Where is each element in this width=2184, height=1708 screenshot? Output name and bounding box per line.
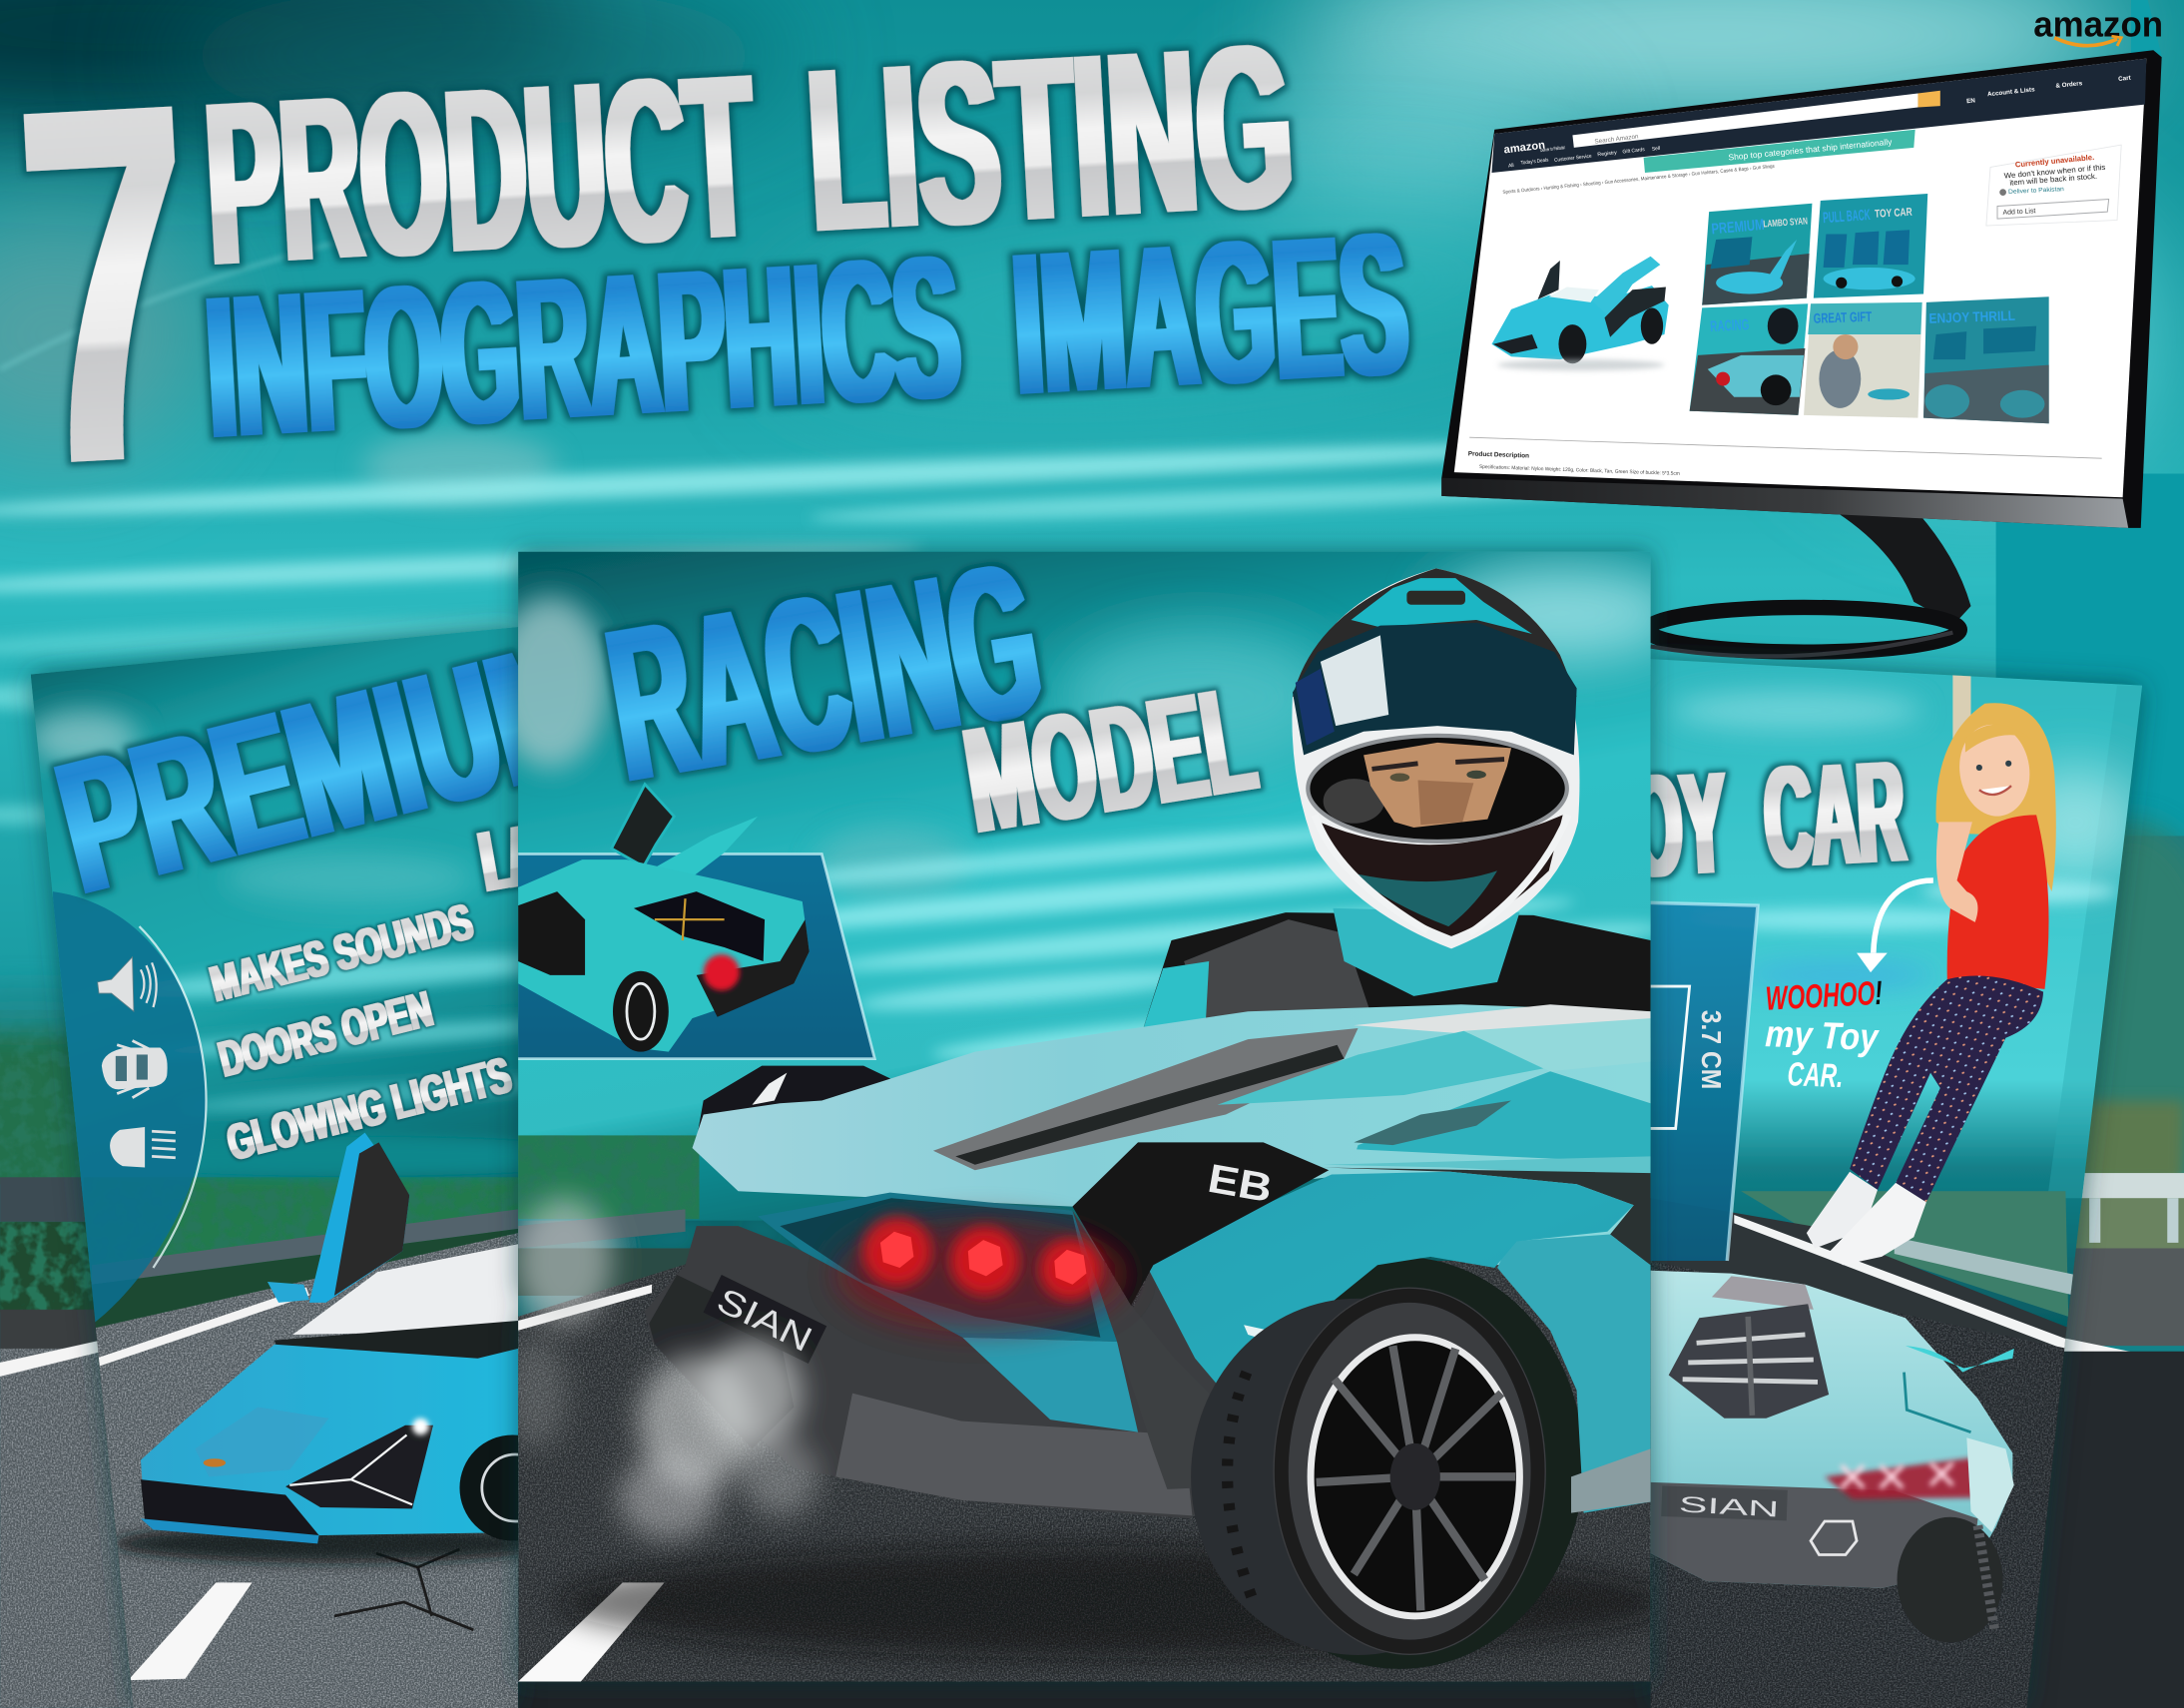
thumbnail: premium: LAMBO SYAN bbox=[1763, 216, 1808, 230]
amazon nav bar: & Orders bbox=[2055, 80, 2083, 90]
monitor screen bbox=[1454, 59, 2146, 497]
inset car: open doors bbox=[518, 785, 810, 1052]
background: road scene right bbox=[2005, 822, 2184, 1708]
callout: woohoo: WOOHOO! bbox=[1765, 975, 1884, 1018]
amazon nav bar: Cart bbox=[2118, 75, 2132, 83]
amazon nav bar: Deliver to Pakistan bbox=[1540, 145, 1566, 154]
callout arrow bbox=[1857, 880, 1933, 972]
icon: speaker bbox=[98, 957, 157, 1011]
amazon nav bar: EN bbox=[1966, 97, 1976, 105]
title line 2: infographics images: INFOGRAPHICS bbox=[202, 213, 965, 480]
panel: left premium bbox=[14, 611, 525, 1708]
feature: makes sounds: MAKES SOUNDS bbox=[205, 893, 478, 1012]
heading: lambo syan: LAMBO SYAN bbox=[474, 768, 766, 910]
monitor stand bbox=[1648, 513, 1971, 656]
driver in helmet bbox=[1139, 568, 1651, 1041]
big car: sian rear three-quarter: EB bbox=[1205, 1155, 1276, 1211]
lower dark bumper bbox=[645, 1226, 1248, 1518]
callout: woohoo: CAR. bbox=[1787, 1056, 1844, 1095]
center panel road bbox=[518, 1261, 1651, 1681]
monitor bbox=[1441, 50, 2162, 656]
license plate: SIAN bbox=[711, 1281, 819, 1360]
taillights bbox=[835, 1216, 1128, 1334]
callout: woohoo bbox=[1765, 975, 1884, 1095]
title line 1: product listing: PRODUCT bbox=[201, 26, 760, 314]
exhaust smoke bbox=[506, 1197, 819, 1539]
right car: sian rear bbox=[1651, 1271, 2014, 1642]
girl on rope bbox=[1807, 663, 2056, 1265]
icon: car with open doors bbox=[102, 1041, 168, 1098]
product description: Product Description bbox=[1468, 450, 1529, 459]
quarter panel bbox=[1497, 1234, 1651, 1513]
teal promo banner bbox=[1644, 130, 1915, 173]
wing badge bbox=[1072, 1142, 1329, 1306]
product description: Specifications: Material: Nylon Weight: 120g, Color: Black, Tan, Green Size of buckle: 5*3.5cm bbox=[1479, 464, 1680, 477]
left car: sian front bbox=[112, 1133, 566, 1563]
right panel sky bbox=[1651, 659, 2145, 1338]
amazon nav bar bbox=[1491, 59, 2146, 173]
right car: sian rear: SIAN bbox=[1678, 1491, 1780, 1521]
body upper deck bbox=[693, 1004, 1651, 1265]
main product car on screen bbox=[1491, 257, 1669, 370]
panel: right toy car bbox=[1586, 659, 2145, 1708]
number 7: 7 bbox=[11, 0, 204, 572]
driver suit bbox=[1139, 912, 1651, 1041]
panel: center racing model bbox=[492, 517, 1685, 1681]
taillight panel bbox=[758, 1193, 1117, 1342]
center panel sky bbox=[492, 552, 1685, 1221]
license plate bbox=[703, 1275, 826, 1364]
heading: toy car: TOY bbox=[1586, 742, 1730, 910]
right panel road bbox=[1651, 1191, 2075, 1708]
thumbnail: racing: RACING bbox=[1710, 316, 1750, 335]
thumbnail: gift for kids bbox=[1804, 302, 1922, 418]
racing helmet bbox=[1292, 568, 1580, 948]
amazon logo: amazon bbox=[2033, 3, 2163, 44]
rear wing bbox=[695, 1066, 892, 1156]
heading: premium: PREMIUM bbox=[41, 599, 613, 934]
thumbnail: pull back: TOY CAR bbox=[1875, 207, 1912, 221]
panel: right toy car: CAR bbox=[1761, 730, 1909, 898]
availability box: We don't know when or if this bbox=[2003, 163, 2106, 181]
big car: sian rear three-quarter bbox=[506, 1004, 1671, 1669]
dimension box: 3.7 CM bbox=[1696, 1010, 1727, 1089]
availability box: Add to List bbox=[2002, 208, 2036, 217]
thumbnail: pull back: PULL BACK bbox=[1823, 207, 1871, 227]
breadcrumb: Sports & Outdoors › Hunting & Fishing › Shooting › Gun Accessories, Maintenance & Storage › Gun Holsters, Cases & Bags › Gun Slings bbox=[1502, 164, 1776, 196]
dimension box bbox=[1651, 902, 1758, 1261]
teal promo banner: Shop top categories that ship internationally bbox=[1728, 137, 1894, 162]
monitor bezel bbox=[1441, 50, 2162, 528]
callout: woohoo: my Toy bbox=[1765, 1012, 1881, 1058]
icon: headlight bbox=[110, 1127, 176, 1168]
amazon nav bar: Sell bbox=[1652, 146, 1661, 153]
background: road scene left bbox=[0, 987, 153, 1708]
availability box: item will be back in stock. bbox=[2009, 172, 2097, 188]
amazon nav bar: Gift Cards bbox=[1622, 147, 1646, 156]
amazon nav bar: Customer Service bbox=[1554, 154, 1592, 164]
heading: model: MODEL bbox=[955, 654, 1265, 864]
thumbnail: premium: PREMIUM bbox=[1711, 217, 1765, 238]
thumbnail: pull back bbox=[1814, 194, 1927, 298]
availability box: Currently unavailable. bbox=[2014, 153, 2095, 169]
thumbnail: enjoy thrill: ENJOY THRILL bbox=[1928, 307, 2016, 326]
amazon nav bar: amazon bbox=[1503, 139, 1546, 156]
amazon nav bar: Search Amazon bbox=[1594, 133, 1639, 146]
feature: doors open: DOORS OPEN bbox=[214, 980, 438, 1087]
wheel arch bbox=[1216, 1257, 1584, 1669]
left panel trees and guardrail bbox=[78, 1126, 518, 1328]
availability box bbox=[1986, 145, 2121, 226]
fender bbox=[1146, 1172, 1634, 1413]
circle highlight panel bbox=[53, 891, 207, 1324]
thumbnail: premium bbox=[1702, 204, 1812, 305]
availability box: Deliver to Pakistan bbox=[2008, 186, 2065, 196]
thumbnail: racing bbox=[1690, 303, 1808, 415]
amazon nav bar: Account & Lists bbox=[1987, 86, 2035, 98]
left panel road bbox=[84, 1233, 518, 1708]
feature: glowing lights: GLOWING LIGHTS bbox=[222, 1047, 516, 1171]
amazon nav bar: All bbox=[1508, 163, 1514, 169]
amazon nav bar: Today's Deals bbox=[1520, 157, 1549, 167]
thumbnail: gift for kids: GREAT GIFT bbox=[1813, 308, 1873, 326]
heading: racing: RACING bbox=[594, 517, 1055, 828]
rear wheel bbox=[1191, 1288, 1546, 1655]
center panel trees and guardrail bbox=[518, 1135, 699, 1296]
dark column bbox=[1072, 1211, 1230, 1489]
inset box bbox=[518, 854, 874, 1059]
product description bbox=[1468, 437, 2102, 477]
thumbnail: enjoy thrill bbox=[1923, 296, 2049, 423]
amazon nav bar: Registry bbox=[1597, 150, 1618, 158]
title line 2: infographics images: IMAGES bbox=[1008, 190, 1412, 437]
left panel sky bbox=[28, 627, 599, 1254]
